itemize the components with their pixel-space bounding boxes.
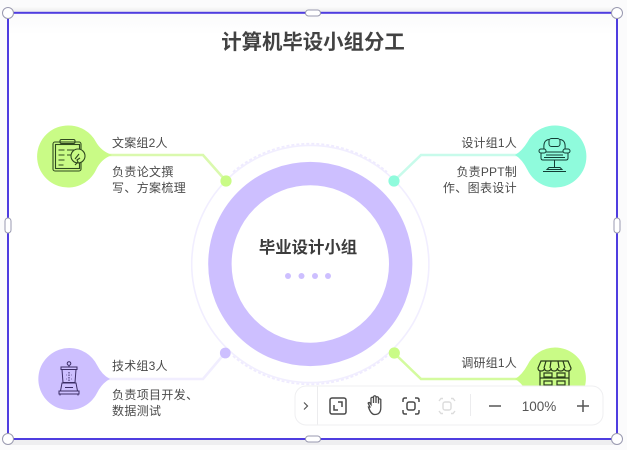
icon: fit selection (403, 398, 419, 414)
icon: storefront (538, 361, 571, 386)
central ring diagram (192, 144, 429, 384)
text block: design group: 设计组1人 (461, 136, 517, 150)
node: research group circle (515, 348, 586, 409)
text block: copy group: 负责论文撰 (112, 164, 174, 179)
node: tech group circle (38, 348, 110, 410)
text block: research group: 调研组1人 (461, 356, 517, 370)
text block: tech group (112, 359, 198, 418)
icon: blender (59, 362, 79, 396)
text block: tech group: 技术组3人 (112, 359, 168, 373)
connector: research group (389, 347, 525, 379)
text block: tech group: 负责项目开发、 (112, 387, 198, 402)
text block: copy group: 文案组2人 (112, 135, 168, 150)
icon: hand (368, 396, 381, 414)
connector: copy group (100, 155, 232, 187)
icon: collapse chevron (304, 402, 308, 410)
icon: disabled focus (439, 398, 455, 414)
center dots (285, 273, 331, 279)
icon: fit to page (330, 398, 346, 414)
icon: zoom out (489, 405, 501, 407)
text block: copy group (112, 135, 186, 195)
icon: document with gauge (53, 140, 85, 171)
node: design group circle (515, 125, 586, 187)
text block: design group (443, 136, 517, 195)
connector: design group (388, 155, 525, 187)
floating toolbar (295, 386, 603, 425)
zoom level: 100% (522, 399, 556, 414)
text block: design group: 作、图表设计 (443, 181, 517, 195)
node: copy group circle (37, 125, 112, 187)
text block: copy group: 写、方案梳理 (112, 180, 186, 195)
text block: tech group: 数据测试 (112, 403, 161, 418)
icon: zoom in (577, 400, 589, 412)
title: 计算机毕设小组分工 (221, 31, 405, 54)
connector: tech group (100, 348, 231, 379)
icon: chair (539, 138, 570, 172)
text block: design group: 负责PPT制 (456, 165, 517, 179)
center label: 毕业设计小组 (259, 239, 357, 257)
